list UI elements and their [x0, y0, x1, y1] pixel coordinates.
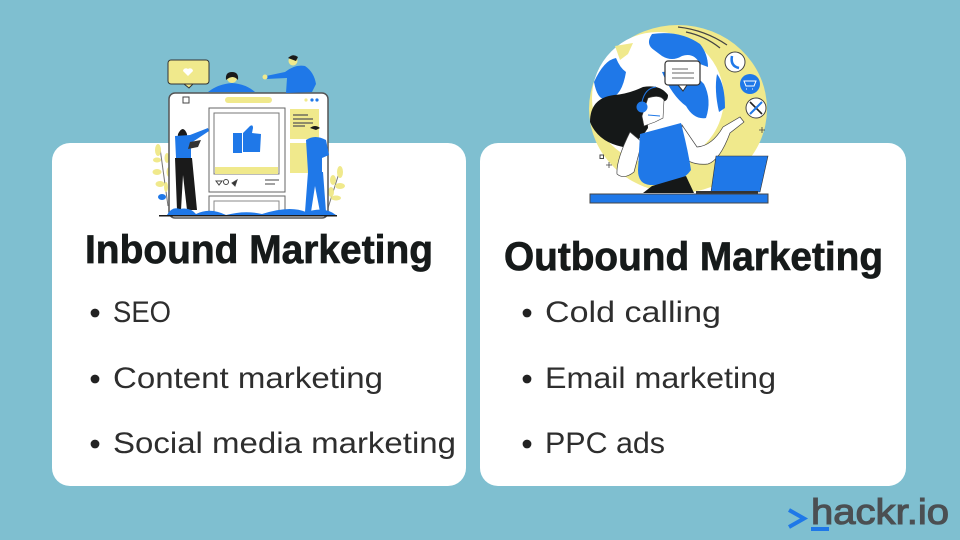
plant left: [152, 144, 172, 206]
logo chevron: [789, 510, 804, 527]
list: outbound items: [523, 296, 776, 460]
post image: [214, 113, 279, 174]
icon: phone: [725, 52, 745, 72]
post icons: [216, 180, 279, 186]
illustration: social media board with people: [152, 55, 345, 218]
item: cold calling: Cold calling: [545, 296, 721, 329]
hair: [590, 86, 668, 147]
heading: inbound marketing: Inbound Marketing: [85, 228, 433, 272]
header dots: [304, 98, 319, 102]
man with thumbs up: [262, 55, 316, 93]
icon: cart: [740, 74, 760, 94]
continents: [594, 33, 725, 118]
ground line: [159, 215, 337, 216]
globe: [592, 32, 724, 164]
yellow note top: [290, 109, 319, 139]
list: inbound items: [91, 296, 456, 460]
woman on top of board: [208, 72, 255, 92]
headset: [636, 87, 660, 116]
arctic patch: [615, 43, 633, 60]
heading: outbound marketing: Outbound Marketing: [504, 235, 883, 279]
blue top: [638, 123, 691, 185]
post card: [209, 108, 285, 192]
second post card: [209, 196, 285, 216]
profile icon: [183, 97, 189, 103]
like speech bubble: [168, 60, 209, 88]
image yellow strip: [215, 167, 278, 174]
thumbs up icon: [233, 125, 261, 153]
item: social media marketing: Social media marketing: [113, 427, 456, 460]
sparkles: [606, 127, 765, 168]
small square: [600, 155, 604, 158]
desk: [590, 194, 768, 203]
face: [642, 96, 664, 126]
yellow search bar: [225, 97, 272, 103]
plant right: [328, 166, 345, 208]
laptop screen: [711, 156, 768, 192]
icon: tools: [746, 98, 766, 118]
ground foliage: [167, 208, 336, 215]
board frame: [169, 93, 328, 218]
panel: outbound marketing: [480, 143, 906, 486]
logo underscore: [811, 527, 829, 531]
man with paper: [305, 126, 329, 212]
item: SEO: SEO: [113, 296, 171, 329]
woman with tablet: [175, 128, 209, 210]
illustration: call centre agent with globe: [589, 25, 768, 203]
panel: inbound marketing: [52, 143, 466, 486]
item: email marketing: Email marketing: [545, 362, 776, 395]
item: PPC ads: PPC ads: [545, 427, 665, 460]
skirt: [643, 176, 694, 193]
motion lines: [678, 27, 727, 48]
yellow circle: [589, 25, 767, 193]
note lines: [293, 115, 313, 126]
item: content marketing: Content marketing: [113, 362, 383, 395]
logo wordmark: hackr.io: [811, 491, 949, 532]
chat bubble: [665, 61, 700, 91]
yellow note bottom: [290, 143, 310, 173]
logo: hackr.io: [789, 491, 949, 532]
laptop base: [696, 191, 758, 194]
second post image: [214, 201, 279, 216]
arms: [617, 117, 744, 177]
item: SEO: [91, 296, 171, 329]
